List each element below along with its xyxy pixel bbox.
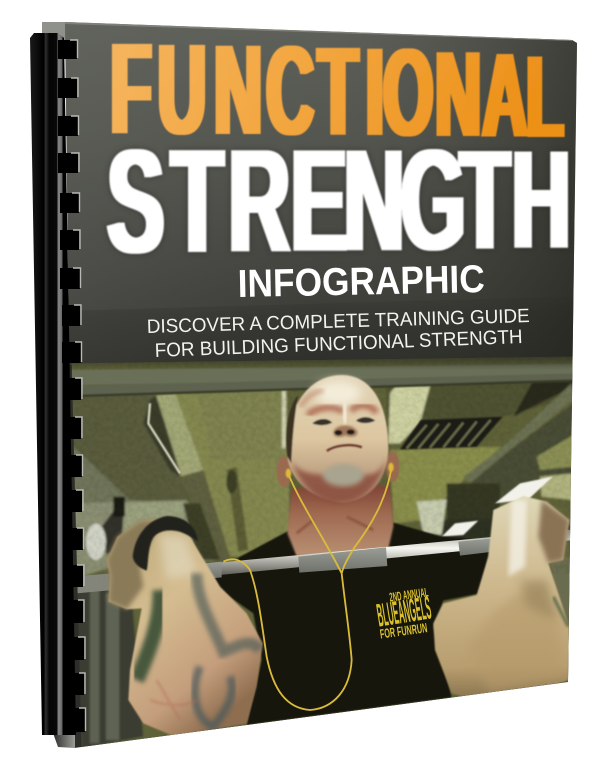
left arm with tattoos (107, 518, 263, 736)
subtitle line one: DISCOVER A COMPLETE TRAINING GUIDE (147, 305, 530, 338)
ears (277, 451, 399, 487)
right arm (433, 496, 569, 697)
ceiling lights (442, 477, 553, 537)
eyebrows and eyes (307, 405, 377, 415)
wall clamp (148, 403, 180, 473)
head (286, 375, 394, 503)
barbell (70, 529, 573, 594)
ceiling vent (400, 417, 503, 449)
page corner at spine foot (53, 733, 75, 748)
title line two: H (512, 122, 570, 278)
title line one: I (366, 24, 384, 163)
upper right ceiling (386, 384, 558, 426)
mouth (327, 445, 362, 451)
shirt print: BLUEANGELS (374, 590, 434, 635)
ceiling texture (76, 386, 571, 569)
title line two: E (291, 120, 347, 283)
title line two: N (344, 121, 404, 282)
subtitle band (69, 310, 574, 365)
title line one (111, 43, 566, 138)
title line one: C (266, 20, 314, 162)
earphone cable (223, 467, 392, 710)
page block behind the cover (42, 22, 66, 40)
title line one: L (526, 31, 564, 162)
black comb spine (30, 33, 76, 735)
cover top highlight (65, 22, 572, 41)
title line one: O (383, 24, 433, 162)
title line one: N (435, 25, 481, 162)
title line two (106, 147, 569, 255)
title line two: S (107, 118, 164, 284)
title line two: G (401, 119, 466, 280)
wristwatch (133, 516, 198, 571)
title line one: T (318, 22, 358, 163)
title line two: T (171, 117, 223, 284)
neck (287, 485, 393, 556)
lower side machinery (78, 590, 144, 747)
overhead pipe (70, 364, 573, 397)
title line two: T (460, 120, 510, 279)
shirt (213, 523, 492, 725)
title line two: R (228, 119, 290, 283)
binding tabs (58, 40, 86, 732)
shirt print: 2ND ANNUAL (389, 586, 429, 605)
gym ceiling background (70, 353, 577, 753)
title line one: F (110, 15, 152, 161)
infographic label: INFOGRAPHIC (237, 258, 485, 306)
shirt print: FOR FUNRUN (379, 621, 428, 642)
title line one: N (214, 19, 262, 162)
title line one: U (158, 17, 206, 161)
subtitle line two: FOR BUILDING FUNCTIONAL STRENGTH (154, 326, 523, 362)
photograph (70, 353, 577, 753)
ear buds (286, 469, 291, 478)
title line one: A (482, 28, 527, 163)
nose (333, 425, 357, 437)
